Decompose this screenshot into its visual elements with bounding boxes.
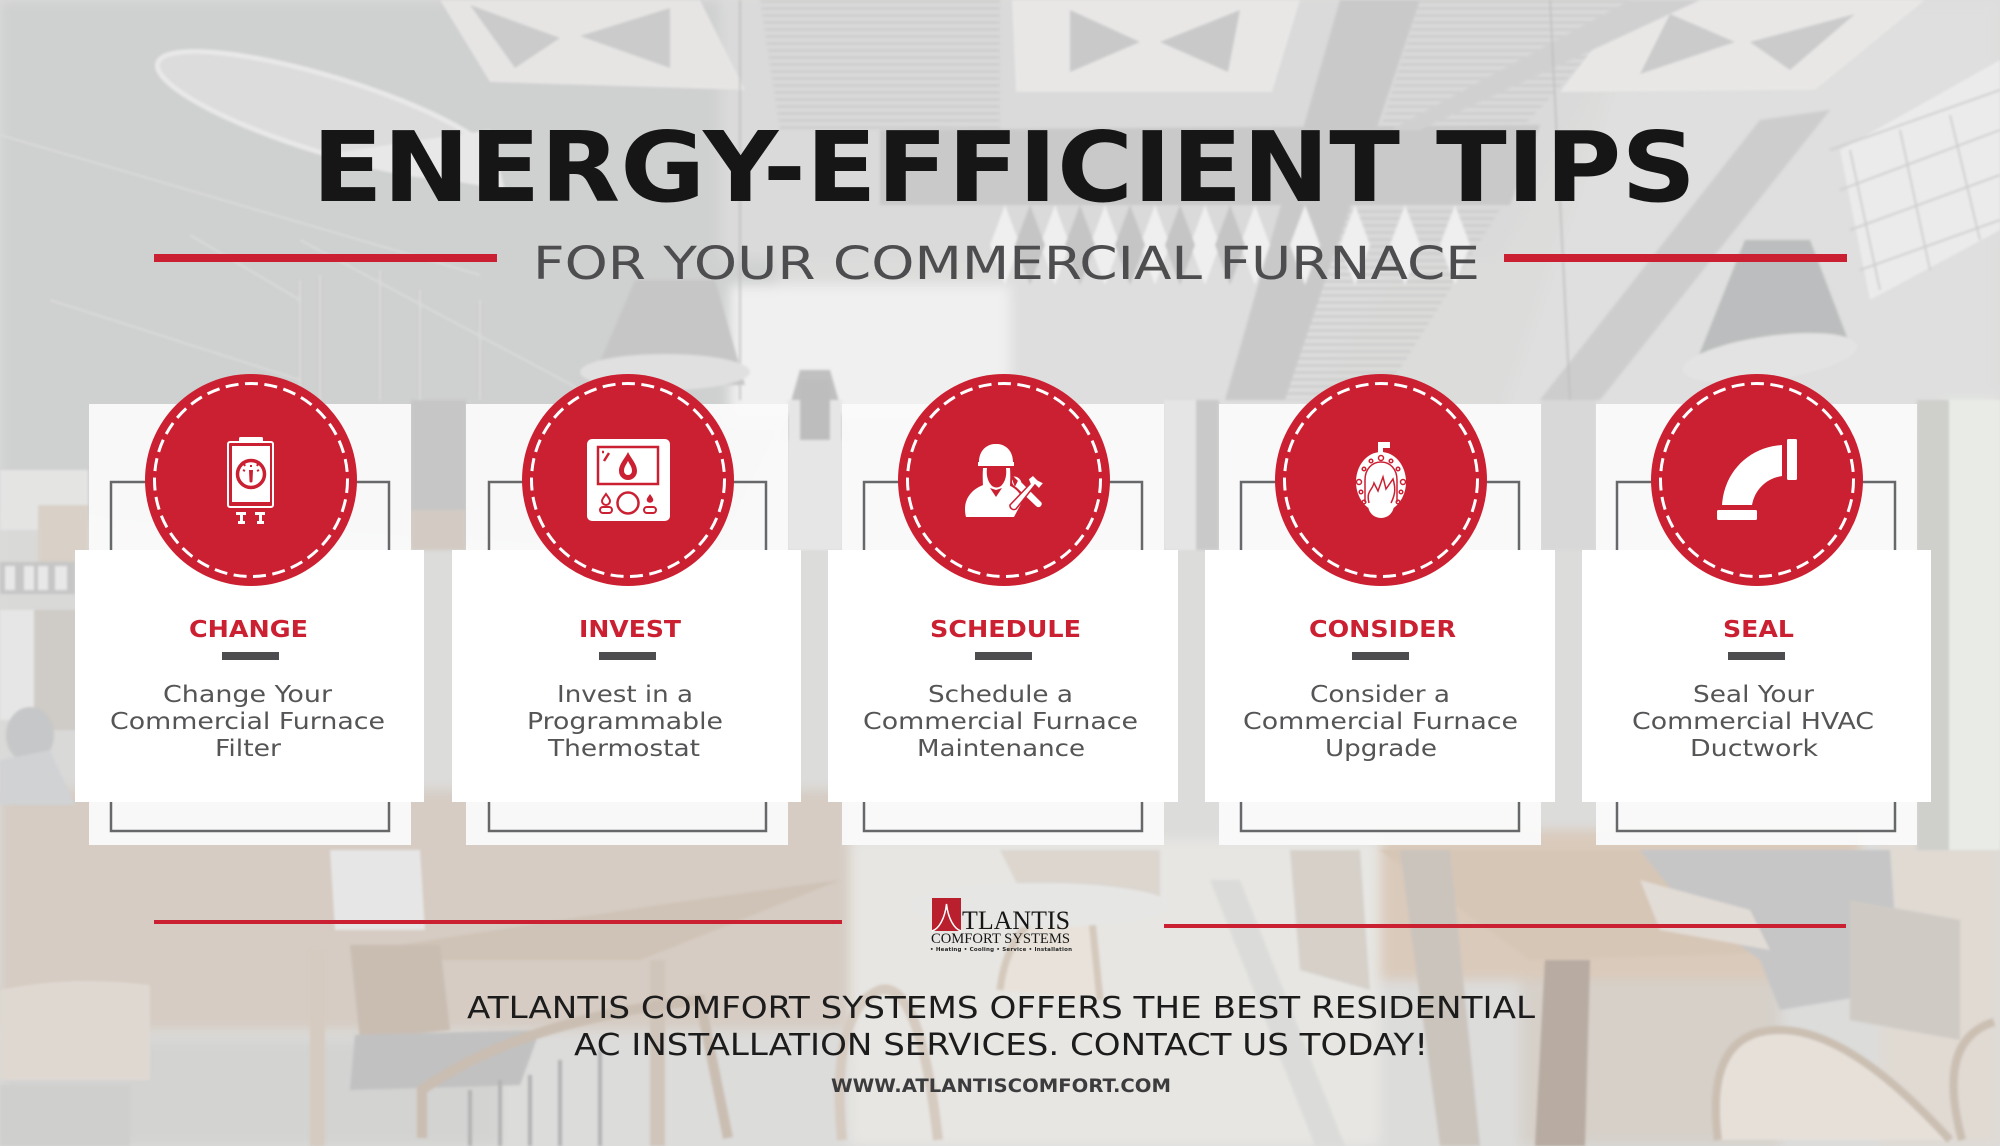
panel: seal	[1582, 374, 1931, 845]
text: change: Commercial Furnace	[110, 709, 385, 735]
bistro chair right	[1716, 1030, 1950, 1140]
big pendant lamp disc	[147, 27, 509, 203]
text: change: Filter	[215, 736, 282, 762]
subtitle with red rules	[154, 237, 1847, 290]
call to action	[467, 991, 1535, 1063]
logo: Atlantis Comfort Systems: TLANTIS	[962, 906, 1070, 935]
panel: consider	[1205, 374, 1555, 845]
icon: worker with tools	[965, 444, 1044, 517]
nets	[1840, 60, 2000, 300]
panel: schedule	[828, 374, 1178, 845]
text: consider: Consider a	[1310, 682, 1450, 708]
subtitle with red rules: FOR YOUR COMMERCIAL FURNACE	[533, 237, 1480, 290]
panel: change	[75, 374, 424, 845]
logo: Atlantis Comfort Systems: COMFORT SYSTEMS	[931, 931, 1070, 947]
heading: seal: SEAL	[1723, 615, 1794, 643]
text: schedule: Maintenance	[917, 736, 1085, 762]
middle chairs	[1000, 900, 1100, 1000]
website url: WWW.ATLANTISCOMFORT.COM	[831, 1075, 1171, 1097]
heading: invest: INVEST	[579, 615, 681, 643]
left wall detail	[0, 470, 88, 530]
logo: Atlantis Comfort Systems: • Heating • Cooling • Service • Installation	[930, 947, 1072, 953]
title: ENERGY-EFFICIENT TIPS	[312, 111, 1696, 224]
ceiling stripes	[760, 0, 1000, 130]
footer rule left	[154, 920, 842, 924]
text: schedule: Commercial Furnace	[863, 709, 1138, 735]
text: change	[110, 682, 385, 762]
gaps between cards: upper	[411, 400, 466, 510]
text: invest: Thermostat	[547, 736, 700, 762]
long table and chairs left	[330, 850, 425, 930]
text: seal: Seal Your	[1693, 682, 1815, 708]
call to action: AC INSTALLATION SERVICES. CONTACT US TODAY!	[574, 1028, 1428, 1063]
heading: consider: CONSIDER	[1309, 615, 1456, 643]
text: schedule: Schedule a	[928, 682, 1073, 708]
text: change: Change Your	[163, 682, 333, 708]
ceiling beams	[1225, 0, 1420, 400]
text: seal	[1632, 682, 1874, 762]
heading: change: CHANGE	[189, 615, 308, 643]
hanging lamps	[590, 280, 745, 385]
call to action: ATLANTIS COMFORT SYSTEMS OFFERS THE BEST RESIDENTIAL	[467, 991, 1535, 1026]
footer rule right	[1164, 924, 1846, 928]
icon: duct elbow	[1717, 439, 1797, 520]
text: schedule	[863, 682, 1138, 762]
text: consider	[1243, 682, 1518, 762]
text: seal: Ductwork	[1690, 736, 1819, 762]
icon: thermostat	[587, 439, 670, 521]
icon: boiler	[228, 437, 273, 524]
heading: schedule: SCHEDULE	[930, 615, 1081, 643]
ceiling vents	[440, 0, 745, 90]
icon: furnace burner	[1356, 442, 1406, 518]
logo: Atlantis Comfort Systems	[930, 898, 1072, 953]
text: consider: Upgrade	[1325, 736, 1437, 762]
text: invest: Programmable	[527, 709, 723, 735]
text: invest	[527, 682, 723, 762]
text: invest: Invest in a	[557, 682, 693, 708]
panel: invest	[452, 374, 801, 845]
bunting row	[990, 205, 1470, 285]
left chalkboard lines	[0, 135, 600, 400]
text: seal: Commercial HVAC	[1632, 709, 1874, 735]
text: consider: Commercial Furnace	[1243, 709, 1518, 735]
table and person right	[1380, 850, 1850, 960]
